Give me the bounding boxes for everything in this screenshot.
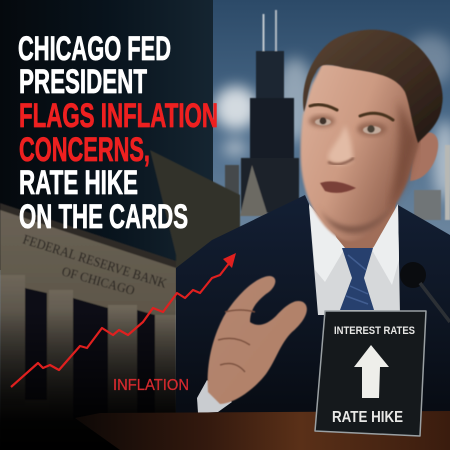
title [18, 30, 218, 236]
engraved building name: OF CHICAGO [60, 263, 136, 298]
man in suit [176, 30, 450, 420]
hair [303, 30, 443, 143]
nose [328, 125, 354, 164]
gesturing hand [208, 276, 307, 404]
finger creases [218, 310, 255, 372]
clouds [214, 35, 450, 200]
title: CONCERNS, [19, 131, 150, 169]
desk [75, 411, 450, 450]
skyline: distant buildings [225, 145, 450, 220]
title: ON THE CARDS [19, 198, 188, 236]
shirt cuff [197, 380, 232, 413]
chart arrow head [223, 253, 236, 268]
inflation line chart [11, 253, 236, 394]
Federal Reserve building [0, 150, 240, 450]
eyebrows [310, 105, 393, 120]
chart label: INFLATION [113, 377, 189, 394]
neck [325, 185, 398, 250]
engraved building name: FEDERAL RESERVE BANK [21, 232, 169, 291]
eye sockets [309, 115, 387, 136]
suit jacket [176, 195, 450, 420]
sign board [315, 311, 426, 436]
face [301, 64, 420, 241]
mouth [320, 181, 356, 193]
building columns [0, 275, 176, 415]
title: RATE HIKE [19, 164, 138, 202]
sign heading: INTEREST RATES [334, 325, 415, 337]
desk sign [315, 311, 426, 436]
cheek shadow [388, 100, 418, 212]
title: PRESIDENT [19, 63, 147, 101]
sign label: RATE HIKE [332, 409, 403, 426]
building windows [23, 288, 155, 420]
icon: up arrow [354, 345, 389, 398]
shirt [309, 206, 400, 315]
microphone [400, 262, 450, 322]
dark tower behind title [0, 0, 213, 270]
title: CHICAGO FED [18, 30, 171, 68]
jaw shadow [318, 205, 392, 233]
ear [410, 132, 438, 181]
eyes [315, 118, 381, 134]
collar [309, 204, 399, 285]
title: FLAGS INFLATION [19, 97, 218, 135]
skyline: Willis Tower [240, 10, 299, 216]
tie [340, 248, 374, 310]
bottom dark gradient [0, 310, 176, 450]
